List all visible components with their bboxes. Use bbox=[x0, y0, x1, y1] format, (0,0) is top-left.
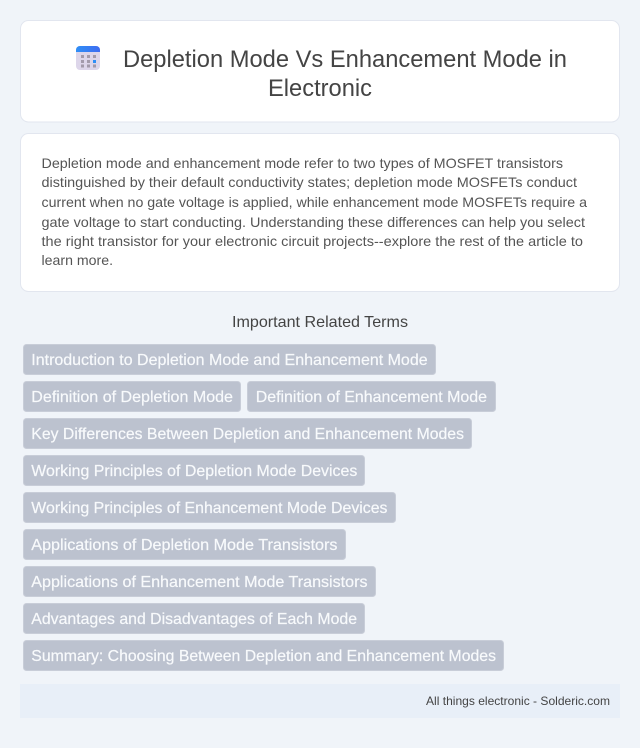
tag: definition of enhancement mode: Definition of Enhancement Mode bbox=[256, 389, 487, 406]
tag: introduction bbox=[24, 344, 436, 374]
tag: advantages and disadvantages: Advantages and Disadvantages of Each Mode bbox=[31, 611, 357, 628]
tag: applications of enhancement mode: Applications of Enhancement Mode Transistors bbox=[31, 574, 368, 591]
tag: definition of enhancement mode bbox=[248, 382, 496, 412]
title: Electronic bbox=[268, 75, 372, 102]
tag: working principles of depletion mode bbox=[24, 456, 364, 486]
tag: definition of depletion mode bbox=[24, 382, 240, 412]
panel: title card bbox=[20, 20, 620, 122]
heading: important related terms: Important Related Terms bbox=[232, 314, 408, 331]
tag: key differences bbox=[24, 418, 472, 448]
icon: calendar bbox=[76, 46, 100, 70]
title: Depletion Mode Vs Enhancement Mode in bbox=[123, 46, 567, 73]
tag: definition of depletion mode: Definition of Depletion Mode bbox=[31, 389, 233, 406]
text block: intro paragraph: gate voltage to start conducting. Understanding these differences can help you select bbox=[42, 214, 585, 230]
panel: intro description bbox=[20, 134, 620, 292]
tag: working principles of depletion mode: Working Principles of Depletion Mode Devices bbox=[31, 463, 357, 480]
text block: intro paragraph: Depletion mode and enhancement mode refer to two types of MOSFET transistors bbox=[42, 155, 563, 171]
tag: working principles of enhancement mode bbox=[24, 492, 396, 522]
tag: key differences: Key Differences Between Depletion and Enhancement Modes bbox=[31, 426, 464, 443]
tag: summary bbox=[24, 640, 504, 670]
footer bbox=[20, 684, 620, 718]
tag: working principles of enhancement mode: Working Principles of Enhancement Mode Devices bbox=[31, 500, 388, 517]
tag: applications of depletion mode bbox=[24, 530, 346, 560]
tag: summary: Summary: Choosing Between Depletion and Enhancement Modes bbox=[31, 648, 496, 665]
text block: intro paragraph bbox=[42, 155, 587, 268]
text block: intro paragraph: distinguished by their default conductivity states; depletion mode MOSFETs conduct bbox=[42, 174, 577, 190]
text block: intro paragraph: learn more. bbox=[42, 252, 113, 268]
tag: advantages and disadvantages bbox=[24, 604, 364, 634]
tag: applications of depletion mode: Applications of Depletion Mode Transistors bbox=[31, 537, 338, 554]
tag: applications of enhancement mode bbox=[24, 566, 376, 596]
tag list bbox=[24, 344, 504, 670]
text block: intro paragraph: the right transistor for your electronic circuit projects--explore the rest of the article to bbox=[42, 233, 583, 249]
title bbox=[123, 46, 567, 102]
tag: introduction: Introduction to Depletion Mode and Enhancement Mode bbox=[31, 352, 428, 369]
footer: All things electronic - Solderic.com bbox=[426, 694, 610, 708]
text block: intro paragraph: current when no gate voltage is applied, while enhancement mode MOSFETs require a bbox=[42, 194, 587, 210]
